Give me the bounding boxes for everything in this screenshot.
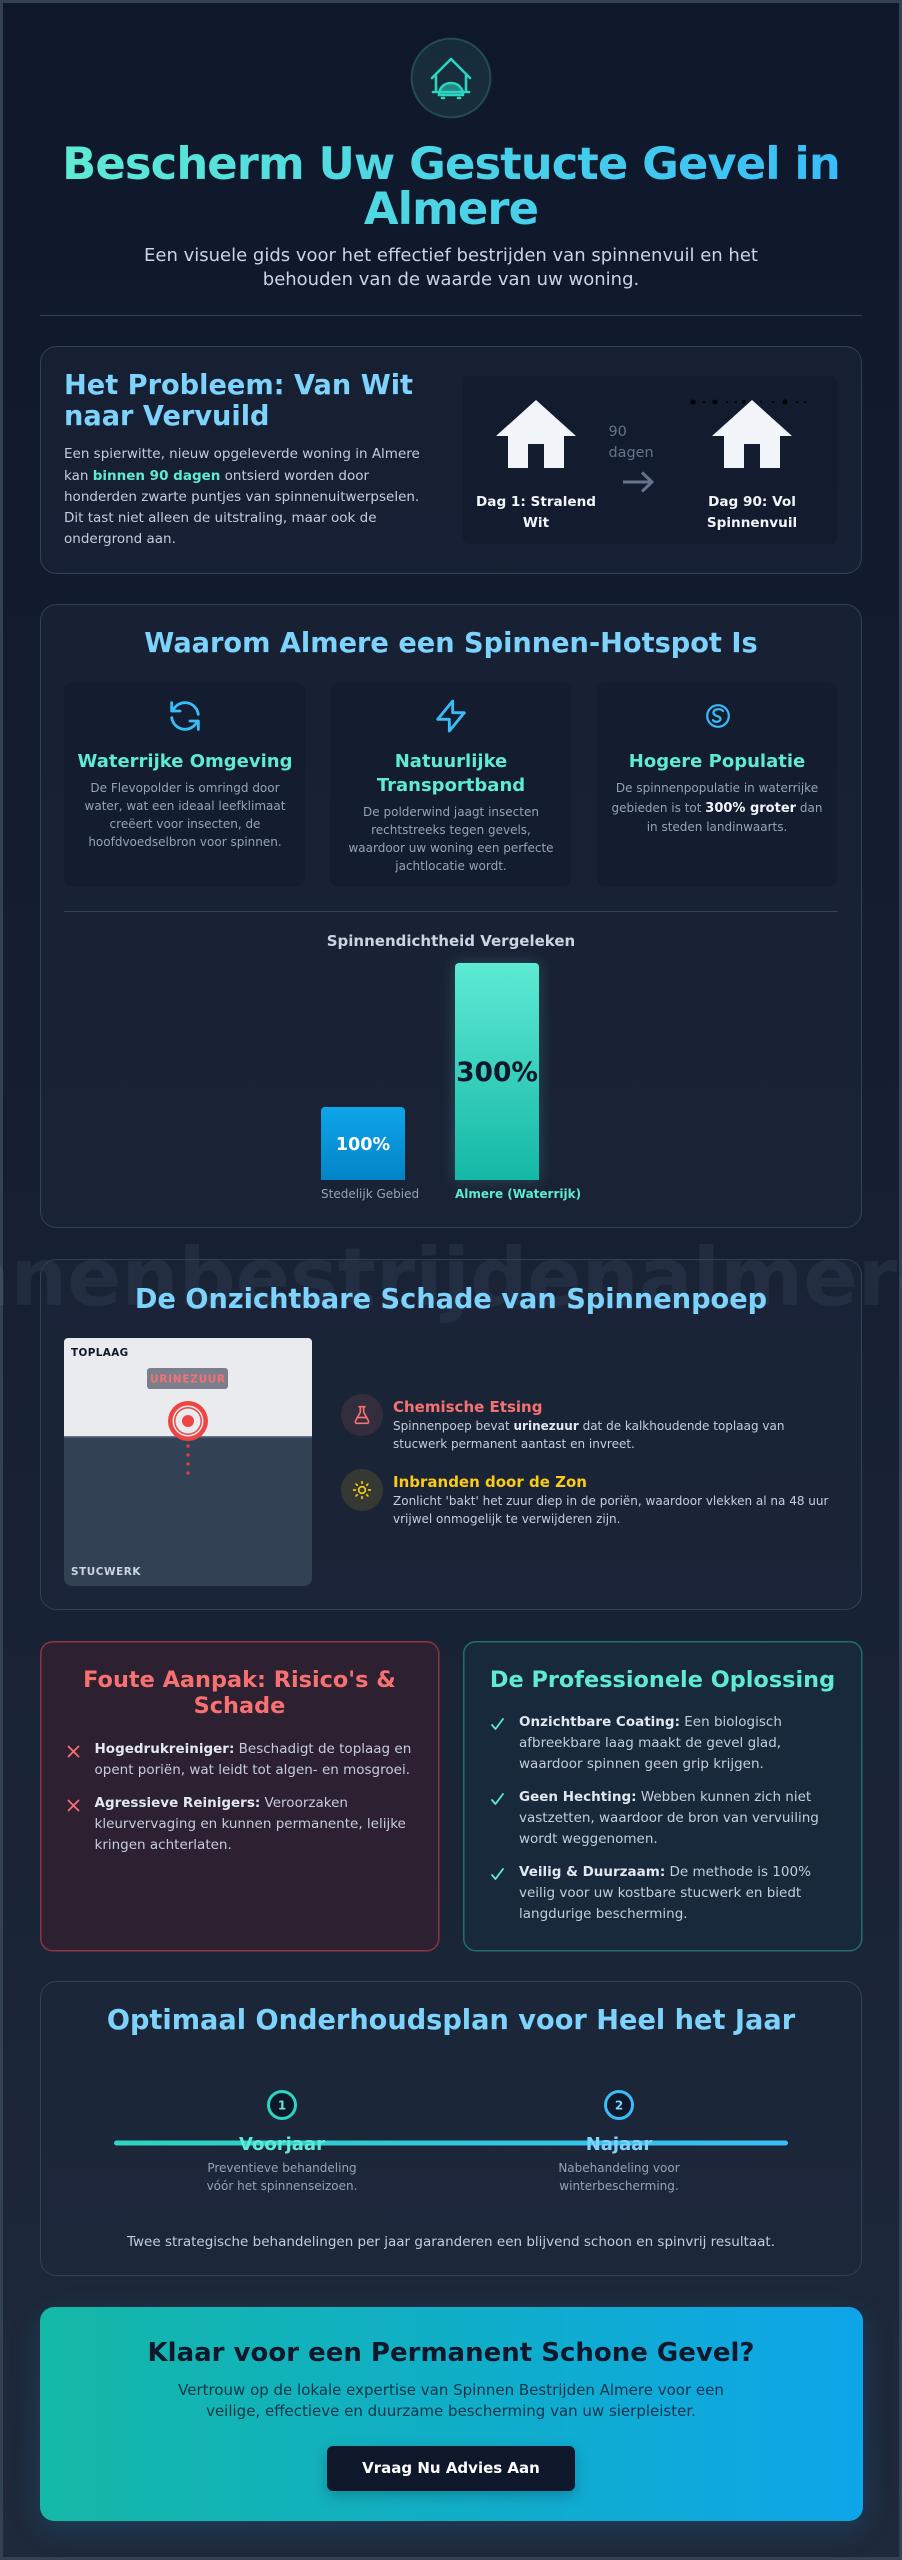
bar: almere	[455, 963, 581, 1201]
item: onzichtbare coating: waardoor spinnen geen grip krijgen.	[519, 1756, 764, 1772]
heading: schade: De Onzichtbare Schade van Spinnenpoep	[135, 1284, 767, 1315]
text block: probleem	[64, 446, 420, 547]
button: Vraag Nu Advies Aan	[362, 2459, 540, 2477]
diagram: stuclagen	[64, 1338, 312, 1586]
item: chemische etsing: Spinnenpoep bevat urinezuur dat de kalkhoudende toplaag van	[393, 1419, 784, 1433]
bar: stedelijk gebied: 100%	[336, 1135, 391, 1155]
item: agressieve reinigers: kleurvervaging en kunnen permanente, lelijke	[94, 1816, 406, 1832]
label: dag 1: Wit	[523, 515, 550, 531]
icon: flask	[341, 1394, 383, 1436]
heading: oplossing: De Professionele Oplossing	[490, 1667, 835, 1693]
item: inbranden door de zon: Inbranden door de Zon	[393, 1473, 587, 1491]
item: veilig en duurzaam: Veilig & Duurzaam: De methode is 100%	[519, 1864, 811, 1880]
subtitle	[144, 245, 758, 290]
label: toplaag: TOPLAAG	[71, 1347, 129, 1359]
step: najaar: Nabehandeling voor	[558, 2161, 680, 2175]
card title: Waterrijke Omgeving	[78, 751, 292, 772]
item: agressieve reinigers: Agressieve Reinigers: Veroorzaken	[94, 1795, 348, 1811]
item: geen hechting: Geen Hechting: Webben kunnen zich niet	[519, 1789, 811, 1805]
bar: stedelijk gebied: Stedelijk Gebied	[321, 1187, 419, 1201]
label: dag 1: Dag 1: Stralend	[476, 494, 596, 510]
item: onzichtbare coating: afbreekbare laag maakt de gevel glad,	[519, 1735, 781, 1751]
title: Almere	[364, 182, 538, 235]
text block: probleem: Een spierwitte, nieuw opgeleverde woning in Almere	[64, 446, 420, 462]
summary: Twee strategische behandelingen per jaar garanderen een blijvend schoon en spinvrij resultaat.	[126, 2234, 775, 2250]
label: stucwerk: STUCWERK	[71, 1566, 141, 1578]
card text: De polderwind jaagt insecten	[363, 805, 539, 819]
step: voorjaar: vóór het spinnenseizoen.	[207, 2179, 357, 2193]
timeline line	[114, 2140, 788, 2146]
title	[62, 137, 840, 235]
item: geen hechting	[492, 1789, 819, 1847]
item: inbranden door de zon: vrijwel onmogelijk te verwijderen zijn.	[393, 1512, 620, 1526]
item: chemische etsing: stucwerk permanent aantast en invreet.	[393, 1437, 635, 1451]
card text: waardoor uw woning een perfecte	[348, 841, 554, 855]
icon: circled S	[707, 705, 729, 727]
card text: De Flevopolder is omringd door	[90, 781, 280, 795]
label: 90 dagen	[608, 424, 654, 461]
card: waterrijke omgeving	[64, 683, 305, 886]
panel: onzichtbare schade	[40, 1260, 862, 1610]
icon: house with car	[412, 38, 490, 118]
bar: almere: 300%	[456, 1057, 538, 1088]
item: hogedrukreiniger: Hogedrukreiniger: Beschadigt de toplaag en	[94, 1741, 411, 1757]
item: chemische etsing: Chemische Etsing	[393, 1398, 542, 1416]
panel: het probleem	[40, 346, 862, 574]
bar: stedelijk gebied	[321, 1107, 419, 1201]
step: voorjaar: Voorjaar	[239, 2134, 325, 2155]
subtitle: behouden van de waarde van uw woning.	[263, 269, 639, 290]
heading: onderhoudsplan: Optimaal Onderhoudsplan voor Heel het Jaar	[107, 2005, 796, 2036]
icon: dirty house	[690, 400, 806, 468]
icon: impact target	[168, 1401, 208, 1441]
card title	[377, 751, 525, 796]
item: onzichtbare coating	[492, 1714, 782, 1772]
icon: sun	[341, 1469, 383, 1511]
card text: in steden landinwaarts.	[647, 820, 787, 834]
bar chart: spinnendichtheid	[321, 932, 581, 1201]
label: dag 90: Dag 90: Vol	[708, 494, 796, 510]
card text: rechtstreeks tegen gevels,	[371, 823, 531, 837]
heading: cta: Klaar voor een Permanent Schone Gevel?	[148, 2338, 754, 2368]
card text: jachtlocatie wordt.	[394, 859, 507, 873]
item: agressieve reinigers: kringen achterlaten.	[94, 1837, 232, 1853]
card text: hoofdvoedselbron voor spinnen.	[88, 835, 282, 849]
panel: foute aanpak	[41, 1642, 439, 1951]
item: geen hechting: wordt weggenomen.	[519, 1831, 658, 1847]
arrow	[623, 472, 652, 492]
heading: foute aanpak: Foute Aanpak: Risico's &	[83, 1667, 396, 1693]
panel: professionele oplossing	[464, 1642, 862, 1951]
header	[62, 38, 840, 290]
label: dag 90: Spinnenvuil	[707, 515, 797, 531]
title: Bescherm Uw Gestucte Gevel in	[62, 137, 840, 190]
text block: probleem: kan binnen 90 dagen ontsierd worden door	[64, 468, 369, 484]
step: voorjaar: Preventieve behandeling	[207, 2161, 357, 2175]
step: najaar: Najaar	[586, 2134, 652, 2155]
item: chemische etsing	[341, 1394, 784, 1451]
label: urinezuur	[147, 1368, 228, 1389]
step: voorjaar	[207, 2092, 357, 2193]
button	[327, 2446, 575, 2491]
step: najaar: 2	[615, 2098, 623, 2112]
heading: foute aanpak	[83, 1667, 396, 1719]
subtitle: Een visuele gids voor het effectief bestrijden van spinnenvuil en het	[144, 245, 758, 266]
card text: creëert voor insecten, de	[110, 817, 260, 831]
label: 90 dagen: 90	[608, 424, 627, 440]
icon: bolt	[438, 701, 464, 731]
item: veilig en duurzaam: langdurige bescherming.	[519, 1906, 688, 1922]
card title: Natuurlijke	[395, 751, 507, 772]
item: inbranden door de zon	[341, 1469, 828, 1526]
chart title: Spinnendichtheid Vergeleken	[327, 932, 575, 950]
panel: hotspot	[40, 604, 862, 1228]
item: veilig en duurzaam: veilig voor uw kostbare stucwerk en biedt	[519, 1885, 801, 1901]
icon: refresh	[172, 703, 198, 729]
card text	[612, 781, 822, 834]
text block: probleem: ondergrond aan.	[64, 531, 176, 547]
heading: hotspot: Waarom Almere een Spinnen-Hotspot Is	[144, 628, 758, 659]
step: najaar: winterbescherming.	[559, 2179, 679, 2193]
item: hogedrukreiniger	[68, 1741, 411, 1778]
heading: het probleem: Het Probleem: Van Wit	[64, 370, 413, 401]
card text	[348, 805, 554, 873]
text block: cta	[178, 2381, 724, 2420]
card text: gebieden is tot 300% groter dan	[612, 801, 822, 816]
label: urinezuur: URINEZUUR	[150, 1374, 226, 1386]
step: voorjaar: 1	[278, 2098, 286, 2112]
step: najaar	[558, 2092, 680, 2193]
icon: clean house	[496, 400, 576, 468]
card text	[85, 781, 286, 849]
card text: De spinnenpopulatie in waterrijke	[616, 781, 818, 795]
heading: foute aanpak: Schade	[194, 1693, 285, 1719]
panel: onderhoudsplan	[40, 1982, 862, 2276]
card text: water, wat een ideaal leefklimaat	[85, 799, 286, 813]
text block: cta: Vertrouw op de lokale expertise van Spinnen Bestrijden Almere voor een	[178, 2381, 724, 2399]
item: onzichtbare coating: Onzichtbare Coating: Een biologisch	[519, 1714, 782, 1730]
card: hogere populatie	[597, 683, 837, 886]
heading: het probleem: naar Vervuild	[64, 401, 270, 432]
heading: het probleem	[64, 370, 413, 432]
card title: Transportband	[377, 775, 525, 796]
item: geen hechting: vastzetten, waardoor de bron van vervuiling	[519, 1810, 819, 1826]
label: dag 90	[707, 494, 797, 531]
card title: Hogere Populatie	[629, 751, 805, 772]
item: veilig en duurzaam	[492, 1864, 811, 1922]
text block: probleem: honderden zwarte puntjes van spinnenuitwerpselen.	[64, 489, 419, 505]
penetration dots	[186, 1444, 190, 1475]
text block: probleem: Dit tast niet alleen de uitstraling, maar ook de	[64, 510, 377, 526]
card: natuurlijke transportband	[330, 683, 571, 886]
item: inbranden door de zon: Zonlicht 'bakt' het zuur diep in de poriën, waardoor vlekken al na 48 uur	[393, 1494, 828, 1508]
text block: cta: veilige, effectieve en duurzame bescherming van uw sierpleister.	[206, 2402, 696, 2420]
bar: almere: Almere (Waterrijk)	[455, 1187, 581, 1201]
panel: call to action	[40, 2307, 863, 2521]
item: hogedrukreiniger: opent poriën, wat leidt tot algen- en mosgroei.	[94, 1762, 410, 1778]
item: agressieve reinigers	[68, 1795, 406, 1853]
comparison: dag 1 versus dag 90	[463, 376, 837, 544]
label: 90 dagen: dagen	[608, 445, 654, 461]
label: dag 1	[476, 494, 596, 531]
